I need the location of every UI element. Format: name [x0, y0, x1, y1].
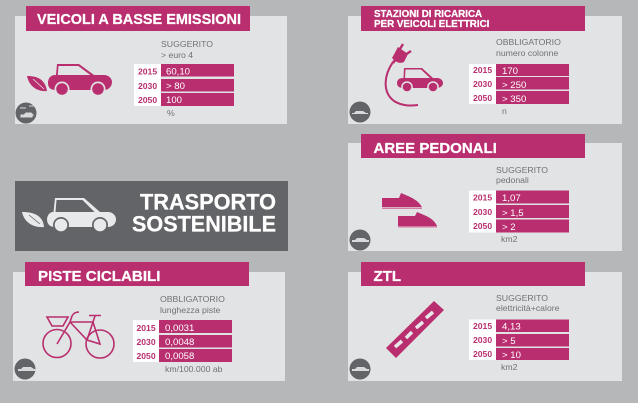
heading: stazioni di ricarica [361, 6, 585, 31]
table: values: 100 [166, 95, 182, 106]
heading: stazioni di ricarica: STAZIONI DI RICARICA [374, 9, 482, 20]
icon: car with leaf [27, 64, 112, 96]
panel: aree pedonali [348, 134, 622, 251]
title [132, 190, 276, 236]
text: category: OBBLIGATORIO [160, 294, 225, 304]
heading: veicoli a basse emissioni: VEICOLI A BASSE EMISSIONI [37, 12, 241, 28]
text: category: pedonali [496, 175, 529, 185]
table: values: 2015 [136, 323, 156, 333]
heading: aree pedonali: AREE PEDONALI [374, 140, 497, 157]
text: unit: km2 [501, 234, 518, 244]
icon: badge [350, 230, 370, 250]
heading: piste ciclabili: PISTE CICLABILI [38, 268, 160, 285]
icon: bicycle [43, 312, 114, 358]
icon: plug and car [386, 44, 443, 106]
table: values [133, 320, 232, 362]
text: category [160, 294, 225, 315]
table: values: 60,10 [166, 66, 190, 78]
table: values: > 5 [502, 336, 516, 347]
table: values: 1,07 [502, 193, 521, 204]
text: category: lunghezza piste [160, 305, 221, 315]
table: values: > 10 [502, 350, 521, 361]
table: values: 170 [502, 66, 518, 77]
panel: piste ciclabili [13, 262, 285, 381]
text: category: SUGGERITO [161, 39, 213, 49]
heading: veicoli a basse emissioni [26, 6, 250, 31]
icon: badge [350, 102, 370, 122]
table: values: > 2 [502, 222, 516, 233]
table: values [469, 190, 569, 233]
table: values: 2050 [136, 351, 156, 361]
table: values: 2015 [138, 66, 157, 76]
text: unit: n [502, 106, 507, 116]
icon: badge [14, 358, 36, 380]
table: values: 2015 [473, 192, 492, 202]
table: values: 2030 [136, 337, 156, 347]
text: category [496, 37, 561, 58]
text: category [496, 165, 548, 185]
table: values: > 80 [166, 81, 185, 92]
title: SOSTENIBILE [132, 212, 276, 236]
table: values [469, 320, 569, 361]
panel: veicoli a basse emissioni [15, 6, 287, 124]
table: values: 2015 [473, 65, 492, 75]
table: values: 0,0058 [165, 351, 194, 362]
table: values: > 1,5 [502, 208, 524, 219]
table: values [134, 64, 234, 106]
table: values: 2030 [473, 79, 492, 89]
heading: ZTL: ZTL [374, 268, 401, 285]
heading: aree pedonali [361, 134, 585, 158]
text: category: SUGGERITO [496, 165, 548, 175]
icon: badge [16, 102, 36, 124]
table: values: > 250 [502, 80, 526, 91]
table: values: 2050 [473, 221, 492, 231]
text: unit: km2 [501, 362, 518, 372]
table: values: 2050 [473, 93, 492, 103]
table: values: 2030 [138, 81, 157, 91]
text: category [496, 293, 560, 313]
table: values [469, 64, 569, 105]
text: category [161, 39, 213, 60]
text: category: OBBLIGATORIO [496, 37, 561, 47]
text: category: numero colonne [496, 48, 558, 58]
icon: road [386, 301, 444, 358]
table: values: 4,13 [502, 322, 521, 332]
table: values: > 350 [502, 94, 526, 105]
table: values: 2030 [473, 207, 492, 217]
panel: ZTL [348, 262, 622, 381]
heading: stazioni di ricarica: PER VEICOLI ELETTRICI [374, 19, 490, 30]
icon: car with leaf [22, 198, 116, 233]
table: values: 2050 [473, 349, 492, 359]
panel: stazioni di ricarica [348, 6, 622, 124]
banner: trasporto sostenibile [15, 181, 288, 251]
table: values: 2015 [473, 321, 492, 331]
heading: piste ciclabili [25, 262, 249, 286]
table: values: 0,0048 [165, 337, 194, 348]
text: category: > euro 4 [161, 50, 193, 60]
title: TRASPORTO [140, 190, 276, 214]
table: values: 2030 [473, 335, 492, 345]
table: values: 2050 [138, 95, 157, 105]
icon: badge [350, 358, 370, 380]
table: values: 0,0031 [165, 323, 194, 334]
text: unit: km/100.000 ab [165, 364, 223, 374]
heading: ZTL [361, 262, 585, 286]
text: category: SUGGERITO [496, 293, 548, 303]
text: category: elettricità+calore [496, 303, 560, 313]
icon: shoes [382, 193, 437, 228]
text: unit: % [167, 108, 175, 118]
